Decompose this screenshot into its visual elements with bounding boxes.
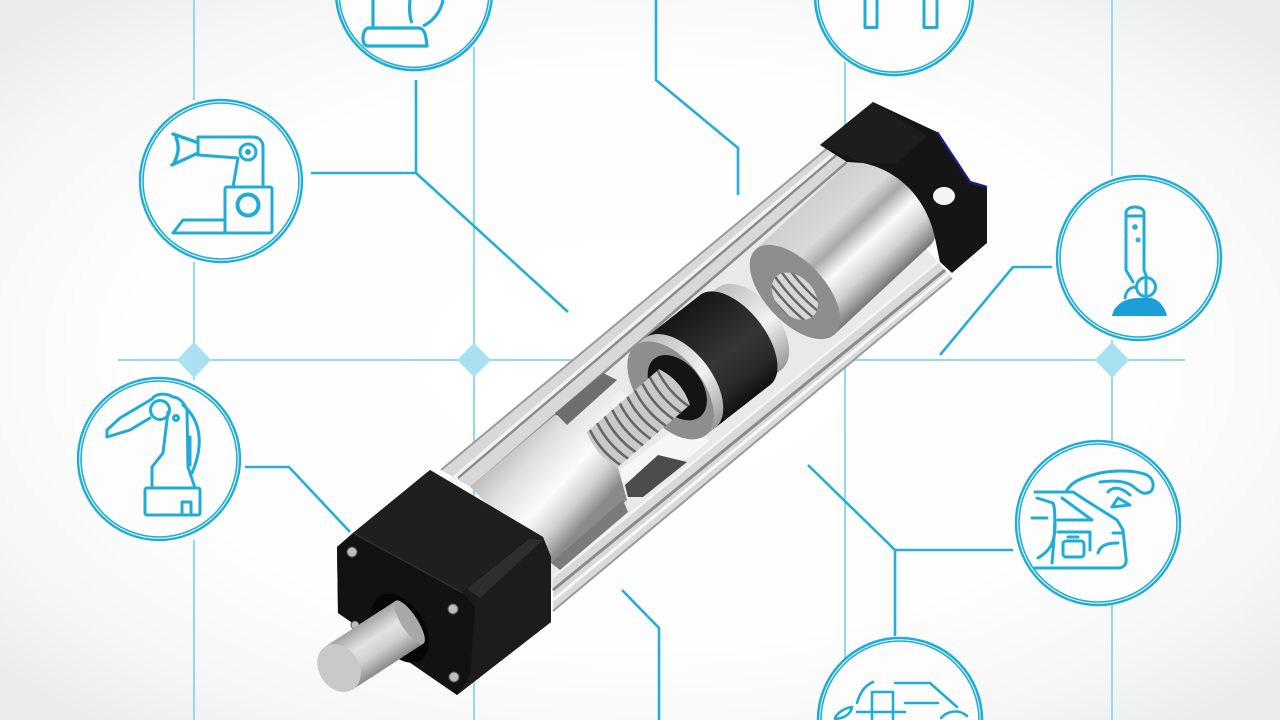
icon: articulated robot arm [78,378,240,540]
icon: top-right partial machine [815,0,973,75]
actuator interior [472,160,938,590]
lower aluminium rail [553,262,952,612]
icon: bottom partial vehicle [818,638,982,720]
connector lines [245,0,1052,720]
icon: robot arm with gripper [140,100,302,262]
lower dark slot [625,455,687,497]
linear actuator [302,102,987,711]
upper aluminium rail [441,146,848,488]
icon: top-left partial robot base [336,0,492,70]
icon: joystick robot [1057,176,1221,340]
front motor block [337,470,551,695]
icon: car with wireless signal [1016,441,1180,605]
right end cap [820,102,987,273]
white notch under screw [620,430,710,483]
right steel cylinder [750,162,935,340]
grid node diamonds [177,342,1129,378]
left steel cylinder [470,390,630,563]
cylinder lower dark edge [551,500,628,570]
steel collar rings and black nut [610,265,808,455]
upper dark slot [555,373,617,425]
lead screw thread [584,366,694,470]
front screws [347,547,459,682]
output shaft [302,583,441,711]
